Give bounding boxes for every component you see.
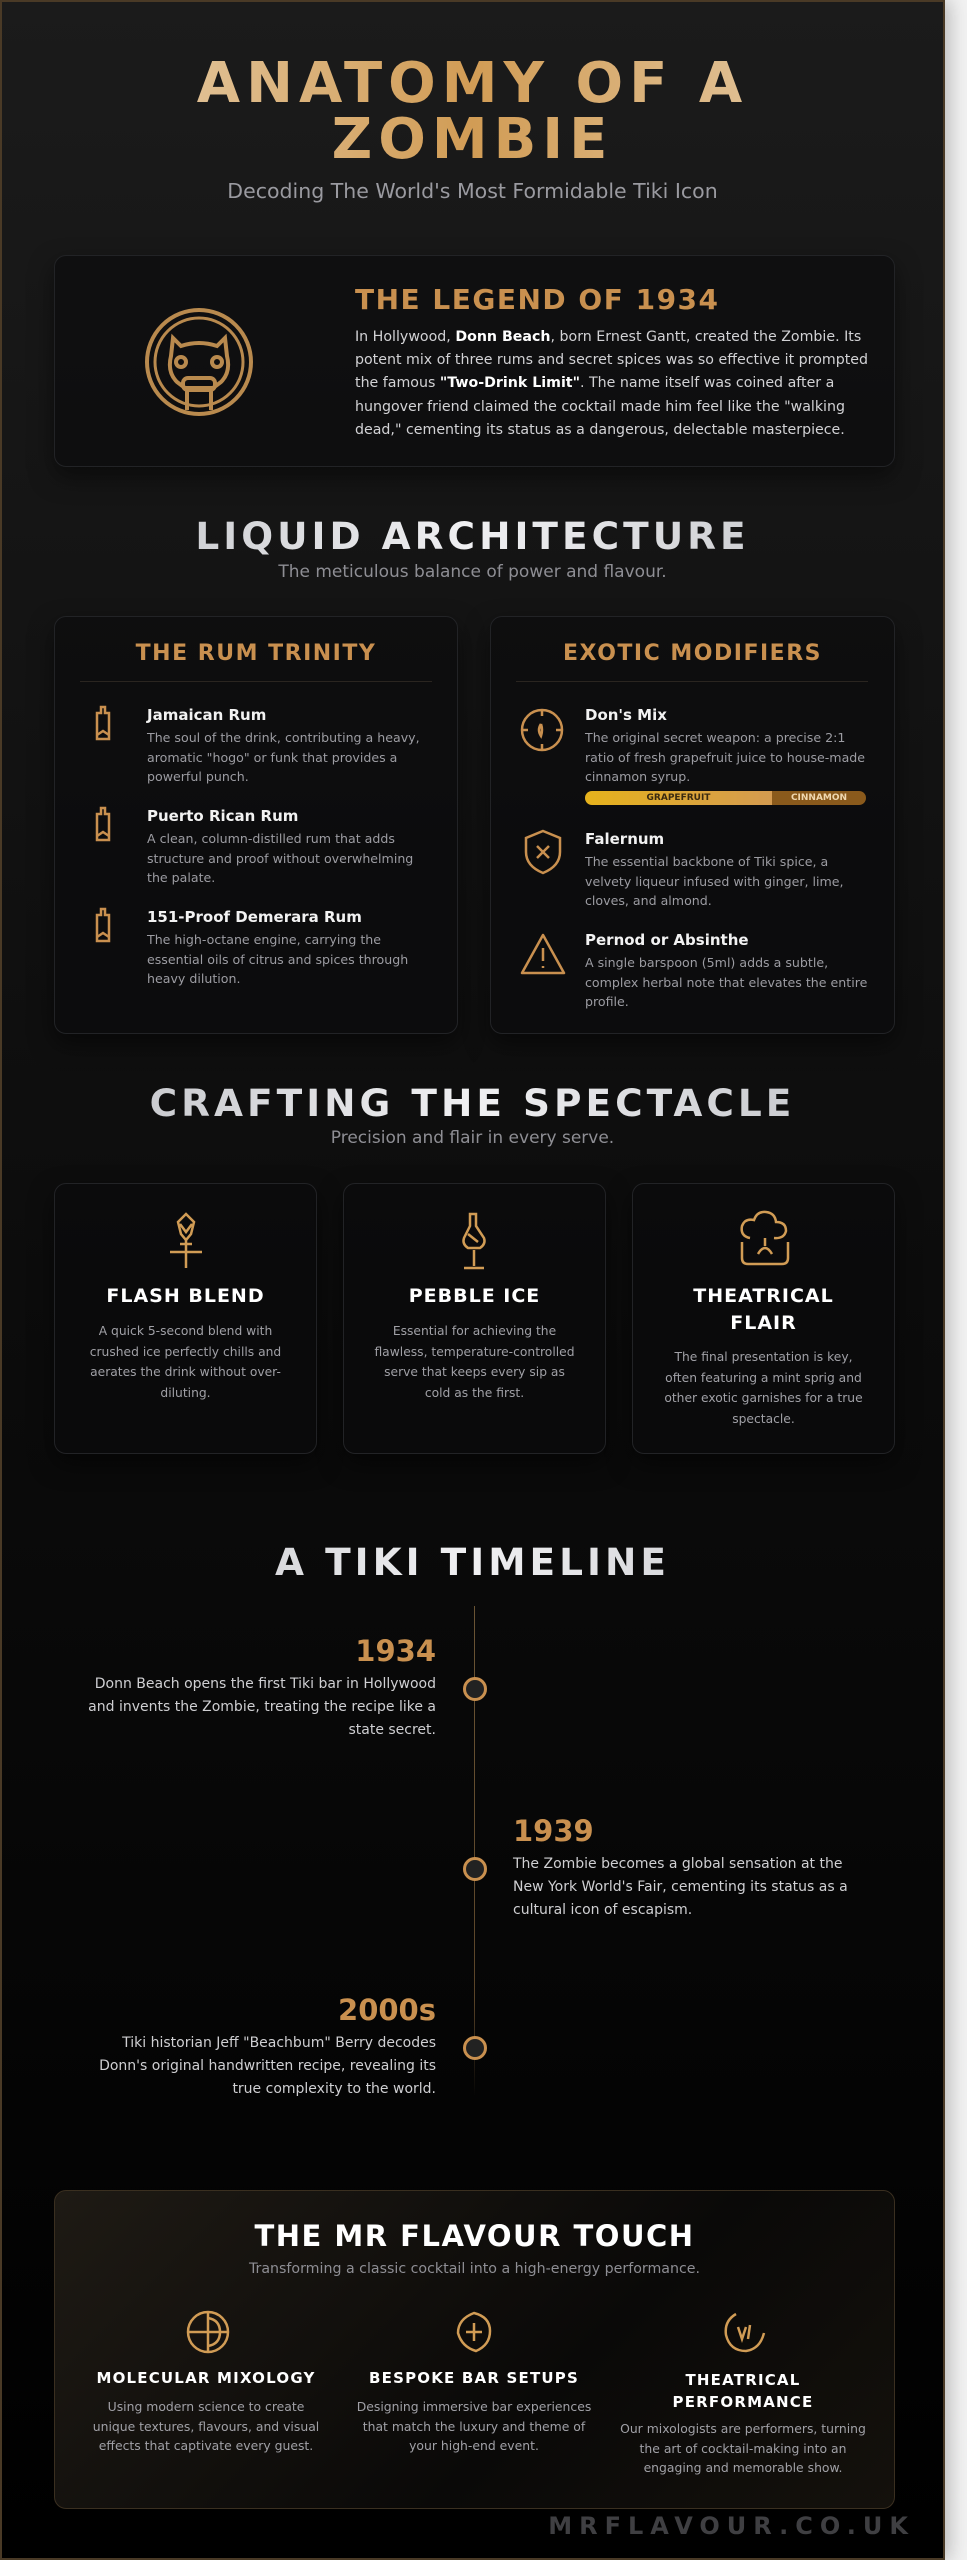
card: flash blend: FLASH BLEND (106, 1285, 265, 1307)
icon: warning (520, 934, 566, 974)
icon: smoke cloud (740, 1210, 790, 1266)
icon: atom circle (186, 2310, 230, 2354)
feature: theatrical performance: PERFORMANCE (673, 2393, 813, 2411)
heading: liquid architecture (2, 514, 943, 558)
event: 2000s: Tiki historian Jeff "Beachbum" Berry decodes Donn's original handwritten recipe, revealing its true complexity to the world. (99, 2035, 436, 2097)
heading: crafting the spectacle (2, 1081, 943, 1125)
icon: tiki mask (145, 308, 253, 416)
icon: bottle (96, 806, 110, 842)
item: demerara rum: 151-Proof Demerara Rum (147, 908, 362, 926)
item: puerto rican rum (96, 806, 413, 885)
event: 1939 (512, 1814, 848, 1918)
item: pernod: Pernod or Absinthe (585, 931, 749, 949)
subtitle: Decoding The World's Most Formidable Tiki Icon (227, 179, 718, 203)
panel: exotic modifiers (490, 616, 895, 1034)
footer: website: MRFLAVOUR.CO.UK (548, 2512, 915, 2540)
heading: THE MR FLAVOUR TOUCH (254, 2219, 695, 2253)
icon: blender (170, 1212, 202, 1268)
feature: molecular mixology: Using modern science to create unique textures, flavours, and visual effects that captivate every guest. (93, 2399, 319, 2453)
chart: ratio bar: CINNAMON (791, 793, 847, 803)
marker: 1939 (463, 1857, 487, 1881)
feature: bespoke bar setups: Designing immersive bar experiences that match the luxury and theme of your high-end event. (357, 2399, 591, 2453)
item: puerto rican rum: A clean, column-distilled rum that adds structure and proof without overwhelming the palate. (147, 831, 413, 885)
event: 2000s (99, 1993, 436, 2097)
event: 2000s: 2000s (338, 1993, 436, 2027)
icon: bottle (96, 706, 110, 740)
feature: bespoke bar setups (357, 2312, 591, 2453)
icon: shield (524, 830, 562, 874)
item: demerara rum (96, 908, 408, 986)
feature: theatrical performance: THEATRICAL (685, 2371, 800, 2389)
feature: molecular mixology (93, 2310, 319, 2453)
feature: theatrical performance: Our mixologists are performers, turning the art of cocktail-making into an engaging and memorable show. (620, 2421, 866, 2475)
subtitle: Transforming a classic cocktail into a high-energy performance. (249, 2261, 700, 2277)
card: flash blend (54, 1183, 317, 1454)
event: 1934: Donn Beach opens the first Tiki bar in Hollywood and invents the Zombie, treating the recipe like a state secret. (88, 1676, 436, 1738)
event: 1934: 1934 (355, 1634, 436, 1668)
item: don's mix: The original secret weapon: a precise 2:1 ratio of fresh grapefruit juice to house-made cinnamon syrup. (585, 730, 865, 784)
item: falernum (524, 830, 844, 908)
card: pebble ice: Essential for achieving the flawless, temperature-controlled serve that keeps every sip as cold as the first. (374, 1324, 575, 1400)
item: puerto rican rum: Puerto Rican Rum (147, 807, 298, 825)
icon: performance swirl (724, 2312, 766, 2352)
icon: bottle (96, 908, 110, 942)
item: don's mix (520, 706, 866, 805)
card: theatrical flair (632, 1183, 895, 1454)
marker: 2000s (463, 2036, 487, 2060)
title: ZOMBIE (332, 107, 613, 172)
icon: lemon plus (456, 2312, 492, 2352)
item: demerara rum: The high-octane engine, carrying the essential oils of citrus and spices through heavy dilution. (147, 932, 408, 986)
chart: ratio bar (585, 791, 866, 805)
panel: mr flavour touch (54, 2190, 895, 2509)
event: 1939: 1939 (513, 1814, 594, 1848)
heading: EXOTIC MODIFIERS (563, 641, 822, 666)
heading: tiki timeline (2, 1540, 943, 1584)
icon: citrus target (520, 708, 564, 752)
item: jamaican rum: The soul of the drink, contributing a heavy, aromatic "hogo" or funk that provides a powerful punch. (147, 730, 420, 784)
feature: molecular mixology: MOLECULAR MIXOLOGY (96, 2369, 316, 2387)
feature: bespoke bar setups: BESPOKE BAR SETUPS (369, 2369, 579, 2387)
text block: In Hollywood, Donn Beach, born Ernest Gantt, created the Zombie. Its potent mix of three rums and secret spices was so effective it prompted the famous "Two-Drink Limit". The name itself was coined after a hungover friend claimed the cocktail made him feel like the "walking dead," cementing its status as a dangerous, delectable masterpiece. (355, 329, 868, 438)
card: pebble ice: PEBBLE ICE (409, 1285, 540, 1307)
event: 1934 (88, 1634, 436, 1738)
heading: crafting the spectacle: CRAFTING THE SPECTACLE (150, 1081, 795, 1125)
item: jamaican rum: Jamaican Rum (147, 706, 266, 724)
card: theatrical flair: The final presentation is key, often featuring a mint sprig and other exotic garnishes for a true spectacle. (664, 1350, 863, 1426)
card: pebble ice (343, 1183, 606, 1454)
card: theatrical flair: THEATRICAL (693, 1285, 834, 1307)
feature: theatrical performance (620, 2312, 866, 2475)
title (2, 56, 943, 168)
heading: tiki timeline: A TIKI TIMELINE (275, 1540, 670, 1584)
chart: ratio bar: GRAPEFRUIT (647, 793, 710, 803)
card: flash blend: A quick 5-second blend with crushed ice perfectly chills and aerates the drink without over-diluting. (90, 1324, 281, 1400)
card: theatrical flair: FLAIR (730, 1312, 797, 1334)
title: ANATOMY OF A (197, 51, 748, 116)
marker: 1934 (463, 1677, 487, 1701)
item: pernod: A single barspoon (5ml) adds a subtle, complex herbal note that elevates the entire profile. (585, 955, 867, 1009)
event: 1939: The Zombie becomes a global sensation at the New York World's Fair, cementing its status as a cultural icon of escapism. (513, 1856, 848, 1918)
item: don's mix: Don's Mix (585, 706, 667, 724)
item: falernum: The essential backbone of Tiki spice, a velvety liqueur infused with ginger, lime, cloves, and almond. (585, 854, 844, 908)
item: pernod (520, 931, 867, 1009)
panel: legend of 1934 (54, 255, 895, 467)
subtitle: Precision and flair in every serve. (331, 1128, 614, 1148)
item: jamaican rum (96, 706, 420, 784)
heading: THE RUM TRINITY (136, 641, 376, 666)
icon: glass (462, 1212, 486, 1270)
heading: liquid architecture: LIQUID ARCHITECTURE (195, 514, 750, 558)
timeline (88, 1606, 848, 2097)
item: falernum: Falernum (585, 830, 664, 848)
heading: THE LEGEND OF 1934 (355, 283, 720, 316)
panel: rum trinity (54, 616, 458, 1034)
subtitle: The meticulous balance of power and flavour. (278, 562, 667, 582)
